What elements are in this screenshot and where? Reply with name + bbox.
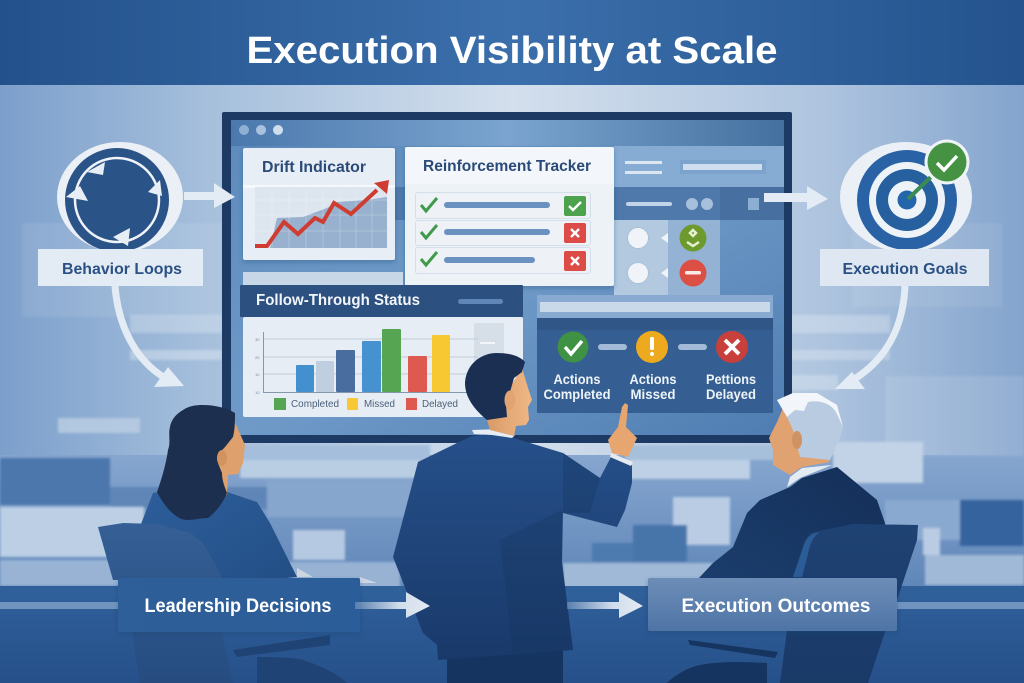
status: actions missed: Missed <box>630 387 676 402</box>
status: actions missed: Actions <box>630 372 676 387</box>
arrow: behavior loops to leadership <box>115 286 184 387</box>
label: execution outcomes <box>648 578 897 631</box>
arrow: leadership decisions <box>355 592 430 618</box>
legend: Completed <box>291 399 339 410</box>
chair <box>98 523 233 683</box>
label: leadership decisions: Leadership Decisions <box>144 596 332 617</box>
cuff <box>610 453 633 466</box>
person: woman seated <box>98 405 377 683</box>
jacket shade <box>500 453 600 654</box>
hair highlight <box>777 393 843 427</box>
icon: execution goals target <box>840 140 972 252</box>
jacket <box>697 467 885 600</box>
label: behavior loops <box>38 249 203 286</box>
bar chart: 10 <box>255 372 260 377</box>
header bar <box>240 285 523 317</box>
hair <box>157 405 235 520</box>
title: Execution Visibility at Scale <box>246 30 778 72</box>
suit <box>141 482 297 584</box>
trousers <box>447 645 563 683</box>
papers on desk <box>297 568 377 583</box>
jacket <box>393 433 632 660</box>
heading: follow-through status: Follow-Through Status <box>256 292 420 309</box>
tracker row 3 <box>416 248 590 274</box>
chair <box>780 524 918 683</box>
panel: follow-through status <box>240 272 523 417</box>
panel: drift indicator <box>243 148 395 260</box>
chair rim <box>793 532 820 577</box>
ear <box>792 431 802 449</box>
heading: reinforcement tracker: Reinforcement Tracker <box>423 158 591 175</box>
face <box>769 408 830 475</box>
arrow: execution goals to outcomes <box>835 286 905 389</box>
label: execution goals: Execution Goals <box>842 261 968 278</box>
side gauge <box>474 323 504 381</box>
header band <box>0 0 1024 85</box>
legend: Delayed <box>422 399 458 410</box>
ear <box>217 450 227 466</box>
legend <box>274 398 458 410</box>
bar chart: 20 <box>255 355 260 360</box>
bar chart: 10 <box>255 390 260 395</box>
label: leadership decisions <box>118 578 360 632</box>
status: petitions delayed: Delayed <box>706 387 756 402</box>
person: man standing and pointing <box>393 353 637 683</box>
window title bar <box>231 120 784 146</box>
ear <box>504 390 516 410</box>
status: petitions delayed <box>706 331 756 402</box>
collar <box>787 465 832 487</box>
chair base <box>667 640 778 683</box>
arrow: dashboard to execution goals <box>764 186 828 210</box>
panel: action status summary <box>537 295 773 413</box>
sidebar toolbar <box>395 146 784 220</box>
connector dashes <box>598 344 707 350</box>
monitor <box>222 112 792 443</box>
status list panel <box>614 220 720 295</box>
hair <box>777 393 843 460</box>
label: execution outcomes: Execution Outcomes <box>682 596 870 617</box>
person: older man seated <box>667 393 918 683</box>
status: actions missed <box>630 331 676 402</box>
bar chart: 30 <box>255 337 260 342</box>
status: actions completed <box>544 332 610 402</box>
chair base <box>233 635 347 683</box>
label: execution goals <box>820 249 989 286</box>
tracker row 2 <box>416 220 590 246</box>
heading: drift indicator: Drift Indicator <box>262 159 366 176</box>
line chart: drift <box>243 180 395 248</box>
arrow: to execution outcomes <box>567 592 643 618</box>
bar chart <box>255 329 478 395</box>
hair <box>465 353 525 420</box>
collar <box>472 429 515 438</box>
arrow: behavior loops to dashboard <box>184 183 235 208</box>
window control dots <box>239 125 283 135</box>
panel: reinforcement tracker <box>405 147 614 286</box>
pointing hand <box>608 403 637 457</box>
status: petitions delayed: Pettions <box>706 372 756 387</box>
status: actions completed: Actions <box>554 372 600 387</box>
status: actions completed: Completed <box>544 387 610 402</box>
label: behavior loops: Behavior Loops <box>62 261 182 278</box>
icon: behavior loops <box>57 142 183 252</box>
face and neck <box>211 418 245 495</box>
neck and face <box>487 368 532 436</box>
legend: Missed <box>364 399 395 410</box>
tracker row 1 <box>416 192 590 218</box>
